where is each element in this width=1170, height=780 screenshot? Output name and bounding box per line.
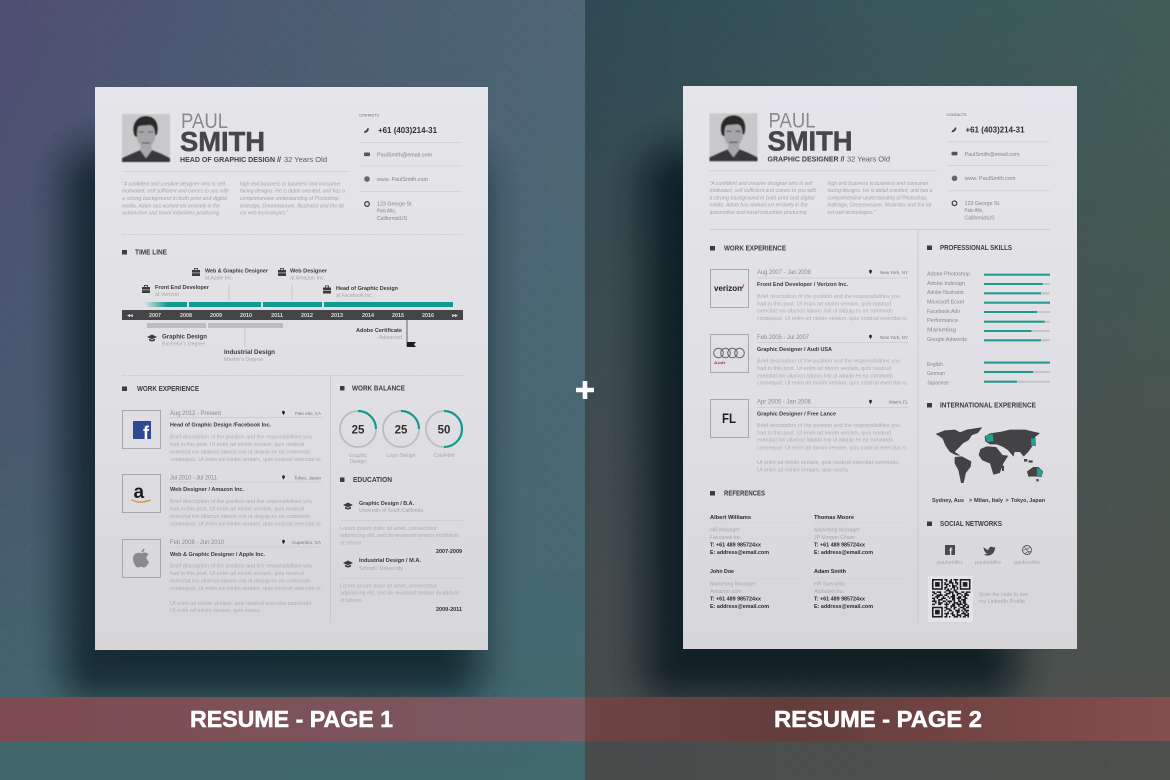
job: verizon: consequat. Ut enim ad minim veniam, quis nostrud exercitat io. xyxy=(757,316,908,322)
job: free lance: Ut enim ad minim veniam, quis nostrud exercitat commodo. xyxy=(757,460,900,466)
reference: john doe: Marketing Manager xyxy=(710,582,756,588)
language bars chart: German xyxy=(927,371,945,377)
job: facebook: Palo Alto, CA xyxy=(295,411,321,416)
reference: thomas moore: E: address@email.com xyxy=(814,550,873,556)
year axis: 2008 xyxy=(180,313,192,319)
timeline chart xyxy=(122,268,463,363)
event: web and graphic designer: at Apple Inc. xyxy=(205,276,233,282)
job title line xyxy=(768,154,890,163)
job: facebook: exercitat ion ullamco laboris nisi ut aliquip ex ea commodo xyxy=(170,450,310,456)
map caption: Tokyo, Japan xyxy=(1011,498,1045,504)
qr caption: my LinkedIn Profile xyxy=(979,599,1025,605)
job: apple: Cupertino, CA xyxy=(292,540,321,545)
education entry: graphic design xyxy=(340,501,463,555)
skill bars chart: Facebook Adv xyxy=(927,309,960,315)
job: audi: New York, NY xyxy=(880,335,908,340)
education bars xyxy=(147,323,283,328)
social: twitter xyxy=(975,547,1001,566)
job: apple: exercitat ion ullamco laboris nisi ut aliquip ex ea commodo xyxy=(170,579,310,585)
job: amazon xyxy=(122,474,322,528)
header block xyxy=(710,109,1050,221)
language bars chart xyxy=(927,362,1050,387)
reference: john doe: T: +61 489 985724xx xyxy=(710,597,761,603)
qr caption xyxy=(979,592,1028,605)
reference: adam smith: Alphabet Inc. xyxy=(814,589,845,595)
year axis: 2013 xyxy=(331,313,343,319)
education entry: graphic design: 2007-2009 xyxy=(436,549,462,555)
icon: amazon logo xyxy=(132,482,150,503)
job title line: HEAD OF GRAPHIC DESIGN // xyxy=(180,155,282,164)
reference: thomas moore: Thomas Moore xyxy=(814,515,854,521)
skill bars chart: Microsoft Ecxel xyxy=(927,300,964,306)
job: apple: consequat. Ut enim ad minim veniam, quis nostrud exercitat io. xyxy=(170,586,322,592)
social: facebook: paulsmiths xyxy=(937,560,963,566)
skill bars chart: Adobe Illustrator xyxy=(927,290,964,296)
experience bars xyxy=(144,302,453,307)
heading: time line xyxy=(122,250,167,256)
education entry: graphic design: ut labore. xyxy=(340,540,363,546)
plus sign between pages xyxy=(576,381,594,399)
job: audi: Graphic Designer / Audi USA xyxy=(757,347,832,353)
reference: adam smith: E: address@email.com xyxy=(814,604,873,610)
reference: albert williams: E: address@email.com xyxy=(710,550,769,556)
job: apple: Ut enim ad minim veniam, quis nostru. xyxy=(170,608,261,614)
skill bars chart: Performance xyxy=(927,318,958,324)
panel: resume page 1 xyxy=(95,87,488,650)
reference: albert williams: T: +61 489 985724xx xyxy=(710,543,761,549)
donut chart: graphic design 25: Graphic xyxy=(349,453,367,459)
social: dribbble: paulsmiths xyxy=(1014,560,1040,566)
donut chart: logo design 25: Logo Design xyxy=(386,453,416,459)
event: head of graphic design: Head of Graphic Design xyxy=(336,286,398,292)
social: facebook xyxy=(937,545,963,566)
language bars chart: English xyxy=(927,362,943,368)
job title line: 32 Years Old xyxy=(847,154,890,163)
job: audi: Feb 2005 - Jul 2007 xyxy=(757,334,810,341)
heading: work experience: WORK EXPERIENCE xyxy=(137,386,199,393)
job title line: 32 Years Old xyxy=(284,155,327,164)
job: apple xyxy=(122,539,322,614)
heading: work experience: WORK EXPERIENCE xyxy=(724,246,786,253)
skill bars chart xyxy=(927,272,1050,343)
job: audi xyxy=(710,334,908,387)
heading: social networks: SOCIAL NETWORKS xyxy=(940,521,1002,528)
soft shadow behind page 1 xyxy=(30,110,520,735)
social: twitter: paulsmiths xyxy=(975,560,1001,566)
year axis: 2016 xyxy=(422,313,434,319)
heading: education: EDUCATION xyxy=(353,477,392,484)
icon: apple logo xyxy=(133,548,149,568)
event: web designer: Web Designer xyxy=(290,268,328,274)
soft shadow behind page 2 xyxy=(606,110,1055,735)
social: dribbble xyxy=(1014,546,1040,566)
job: amazon: Web Designer / Amazon Inc. xyxy=(170,487,245,493)
event: adobe certificate: Adobe Certificate xyxy=(356,328,402,334)
reference: thomas moore: JP Morgan Chase xyxy=(814,535,855,541)
reference: albert williams: Facebook Inc. xyxy=(710,535,742,541)
job: facebook: Aug 2012 - Present xyxy=(170,410,221,417)
banner: resume page 1 xyxy=(0,697,585,741)
heading: references: REFERENCES xyxy=(724,491,765,498)
year axis: ▸▸ xyxy=(451,313,458,319)
reference: john doe xyxy=(710,569,769,610)
job: facebook: Head of Graphic Design /Facebook Inc. xyxy=(170,423,271,429)
job: verizon xyxy=(710,269,908,322)
education entry: industrial design xyxy=(340,558,463,613)
reference: john doe: Amazon.com xyxy=(710,589,742,595)
map caption: Milan, Italy xyxy=(974,498,1003,504)
job: apple: had in this post. Ut enim ad minim veniam, quis nostrud xyxy=(170,571,304,577)
qr caption: Scan the code to see xyxy=(979,592,1028,598)
skill bars chart: Google Adwords xyxy=(927,337,967,343)
job: verizon: Brief description of the position and the responsibilities you xyxy=(757,294,900,300)
reference: adam smith: Adam Smith xyxy=(814,569,846,575)
event: adobe certificate: Advanced xyxy=(379,335,402,341)
job: apple: Feb 2008 - Jun 2010 xyxy=(170,539,225,546)
event: front end developer xyxy=(142,285,210,298)
language bars chart: Japanese xyxy=(927,381,949,387)
event: adobe certificate xyxy=(356,320,416,347)
map caption: Sydney, Aus xyxy=(932,498,964,504)
reference: john doe: E: address@email.com xyxy=(710,604,769,610)
job: free lance: Miami, FL xyxy=(889,400,908,405)
job: free lance xyxy=(710,399,908,473)
heading: professional skills: PROFESSIONAL SKILLS xyxy=(940,245,1012,252)
event: graphic design degree: Graphic Design xyxy=(162,334,207,341)
icon: audi logo xyxy=(714,348,744,365)
job: free lance: Graphic Designer / Free Lance xyxy=(757,412,836,418)
job: verizon: Aug 2007 - Jan 2008 xyxy=(757,269,812,276)
job: verizon: exercitat ion ullamco laboris nisi ut aliquip ex ea commodo xyxy=(757,309,893,315)
world map xyxy=(936,428,1043,483)
background: right panel xyxy=(585,0,1170,780)
education entry: industrial design: School / University xyxy=(359,566,403,572)
year axis: 2011 xyxy=(271,313,283,319)
banner: resume page 2: RESUME - PAGE 2 xyxy=(774,706,982,732)
job: amazon: consequat. Ut enim ad minim veniam, quis nostrud exercitat io. xyxy=(170,522,322,528)
map caption xyxy=(932,498,1045,504)
year axis: 2009 xyxy=(210,313,222,319)
job: apple: Web & Graphic Designer / Apple Inc. xyxy=(170,552,265,558)
event: graphic design degree: Bachelor's Degree xyxy=(162,342,205,348)
job: audi: had in this post. Ut enim ad minim veniam, quis nostrud xyxy=(757,366,891,372)
job: amazon: Jul 2010 - Jul 2011 xyxy=(170,474,218,482)
year axis: 2012 xyxy=(301,313,313,319)
donut chart: css html 50: Css/Html xyxy=(433,453,455,459)
donut chart: graphic design 25: 25 xyxy=(352,424,365,436)
job: facebook xyxy=(122,410,322,463)
job: audi: exercitat ion ullamco laboris nisi ut aliquip ex ea commodo xyxy=(757,373,893,379)
event: industrial design degree: Master's Degree xyxy=(224,357,263,363)
heading: time line: TIME LINE xyxy=(135,250,167,256)
job: amazon: had in this post. Ut enim ad minim veniam, quis nostrud xyxy=(170,506,304,512)
donut chart: graphic design 25: Design xyxy=(350,459,366,465)
reference: albert williams: Albert Williams xyxy=(710,515,751,521)
event: web designer xyxy=(278,268,328,282)
event: web and graphic designer: Web & Graphic Designer xyxy=(205,268,269,274)
year axis: ◂◂ xyxy=(126,313,133,319)
job: free lance: Apr 2005 - Jan 2006 xyxy=(757,399,812,406)
reference: thomas moore xyxy=(814,515,873,556)
job: audi: consequat. Ut enim ad minim veniam, quis nostrud exercitat io. xyxy=(757,381,908,387)
reference: thomas moore: T: +61 489 985724xx xyxy=(814,543,865,549)
job: amazon: Tokyo, Japan xyxy=(294,476,321,480)
education entry: graphic design: University of South California xyxy=(359,508,423,514)
heading: work balance: WORK BALANCE xyxy=(352,386,405,392)
reference: adam smith: HR Specialist xyxy=(814,582,846,588)
event: front end developer: Front End Developer xyxy=(155,285,210,291)
heading: international experience: INTERNATIONAL EXPERIENCE xyxy=(940,403,1036,410)
job: facebook: Brief description of the position and the responsibilities you xyxy=(170,434,312,440)
job: amazon: Brief description of the position and the responsibilities you xyxy=(170,499,312,505)
social: facebook: f xyxy=(949,547,953,558)
event: front end developer: at Verizon xyxy=(155,292,179,298)
job: verizon: Front End Developer / Verizon Inc. xyxy=(757,282,849,288)
job: free lance: had in this post. Ut enim ad minim veniam, quis nostrud xyxy=(757,430,891,436)
job: free lance: exercitat ion ullamco laboris nisi ut aliquip ex ea commodo xyxy=(757,438,893,444)
year axis xyxy=(122,310,463,320)
job: amazon: exercitat ion ullamco laboris nisi ut aliquip ex ea commodo xyxy=(170,514,310,520)
event: head of graphic design xyxy=(323,286,398,299)
event: industrial design degree: Industrial Design xyxy=(224,349,275,356)
donut chart: logo design 25: 25 xyxy=(395,424,408,436)
header block xyxy=(122,110,462,222)
year axis: 2015 xyxy=(392,313,404,319)
education entry: industrial design: ut labore. xyxy=(340,598,363,604)
background: left panel xyxy=(0,0,585,780)
education entry: industrial design: Lorem ipsum dolor sit amet, consectetur xyxy=(340,583,437,589)
education entry: industrial design: 2009-2011 xyxy=(436,607,462,613)
icon: facebook logo: f xyxy=(143,423,150,443)
reference: john doe: John Doe xyxy=(710,569,734,575)
job: apple: Brief description of the position and the responsibilities you xyxy=(170,564,312,570)
job: apple: Ut enim ad minim veniam, quis nostrud exercitat commodo. xyxy=(170,601,313,607)
job: verizon: New York, NY xyxy=(880,270,908,275)
banner: resume page 2 xyxy=(585,697,1170,741)
year axis: 2014 xyxy=(362,313,374,319)
map caption: > xyxy=(1006,498,1009,504)
education entry: graphic design: Graphic Design / B.A. xyxy=(359,501,414,507)
donut chart: graphic design 25 xyxy=(340,411,376,465)
event: head of graphic design: at Facebook Inc. xyxy=(336,293,373,299)
map caption: > xyxy=(969,498,972,504)
job: free lance: Brief description of the position and the responsibilities you xyxy=(757,423,900,429)
job: facebook: consequat. Ut enim ad minim veniam, quis nostrud exercitat io. xyxy=(170,457,322,463)
job: free lance: consequat. Ut enim ad minim veniam, quis nostrud exercitat io. xyxy=(757,445,908,451)
job: free lance: Ut enim ad minim veniam, quis nostru. xyxy=(757,467,850,473)
job title line: GRAPHIC DESIGNER // xyxy=(768,154,845,163)
year axis: 2007 xyxy=(149,313,161,319)
reference: albert williams: HR Manager xyxy=(710,528,740,534)
banner: resume page 1: RESUME - PAGE 1 xyxy=(190,706,393,732)
education entry: graphic design: Lorem ipsum dolor sit amet, consectetur xyxy=(340,526,437,532)
reference: albert williams xyxy=(710,515,769,556)
heading: references xyxy=(710,491,765,498)
reference: adam smith: T: +61 489 985724xx xyxy=(814,597,865,603)
donut chart: css html 50 xyxy=(426,411,462,459)
skill bars chart: Adobe Indesign xyxy=(927,281,965,287)
education entry: graphic design: adipisicing elit, sed do eiusmod tempor incididunt xyxy=(340,533,460,539)
skill bars chart: Marketing xyxy=(927,328,956,334)
education entry: industrial design: Industrial Design / M.A. xyxy=(359,558,422,564)
job: verizon: had in this post. Ut enim ad minim veniam, quis nostrud xyxy=(757,301,891,307)
event: web designer: at Amazon Inc. xyxy=(290,276,325,282)
event: industrial design degree xyxy=(224,349,275,363)
panel: resume page 2 xyxy=(683,86,1077,649)
job: free lance: FL xyxy=(722,411,736,426)
reference: adam smith xyxy=(814,569,873,610)
qr code xyxy=(928,576,973,622)
donut chart: logo design 25 xyxy=(383,411,419,459)
event: graphic design degree xyxy=(147,334,207,348)
event: web and graphic designer xyxy=(192,268,269,282)
icon: amazon logo: a xyxy=(134,482,144,503)
reference: thomas moore: Marketing Manager xyxy=(814,528,860,534)
donut chart: css html 50: 50 xyxy=(438,424,450,436)
job: facebook: had in this post. Ut enim ad minim veniam, quis nostrud xyxy=(170,442,304,448)
year axis: 2010 xyxy=(240,313,252,319)
icon: verizon logo: verizon xyxy=(714,284,742,293)
education entry: industrial design: adipisicing elit, sed do eiusmod tempor incididunt xyxy=(340,591,460,597)
job: audi: Brief description of the position and the responsibilities you xyxy=(757,359,900,365)
icon: audi logo: Audi xyxy=(714,361,725,365)
icon: facebook logo xyxy=(133,421,151,443)
skill bars chart: Adobe Photoshop xyxy=(927,272,970,278)
